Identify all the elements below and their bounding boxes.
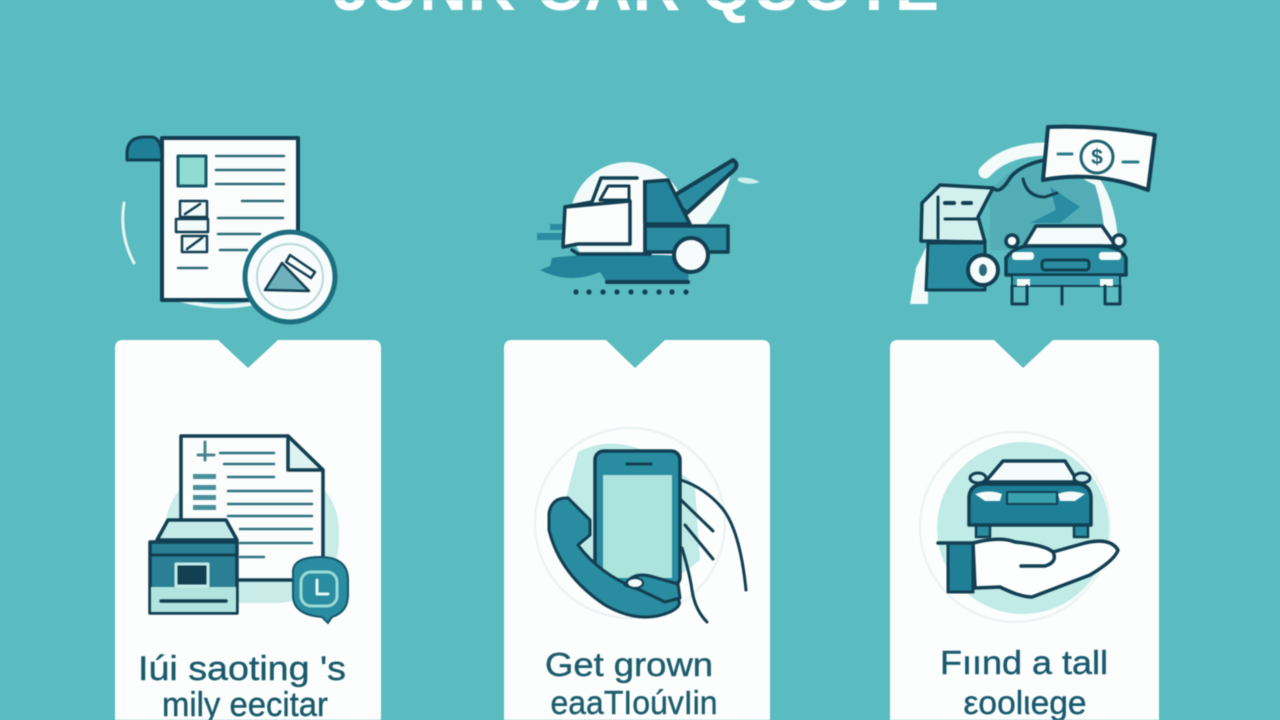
step one label: Iúi saoting 's [138,650,346,688]
step three label [940,644,1108,720]
step two label [545,646,718,720]
icon: phone and handset in hand [535,428,746,622]
icon: car with cash: $ [1091,146,1103,169]
icon: document with printer [150,436,348,623]
icon: quote document with badge [123,137,335,322]
step three label: εoolιege [964,684,1086,720]
icon: car on open hand [920,432,1118,622]
icon: tow truck [537,160,760,295]
step two label: eaaTIoúvIin [550,684,718,720]
icon: car with cash [910,127,1155,304]
step three label: Fıınd a tall [940,644,1108,681]
panel: step one card [115,340,381,720]
step two label: Get grown [545,646,713,683]
panel: step two card [504,340,770,720]
panel: step three card [890,340,1159,720]
step one label [138,650,346,720]
